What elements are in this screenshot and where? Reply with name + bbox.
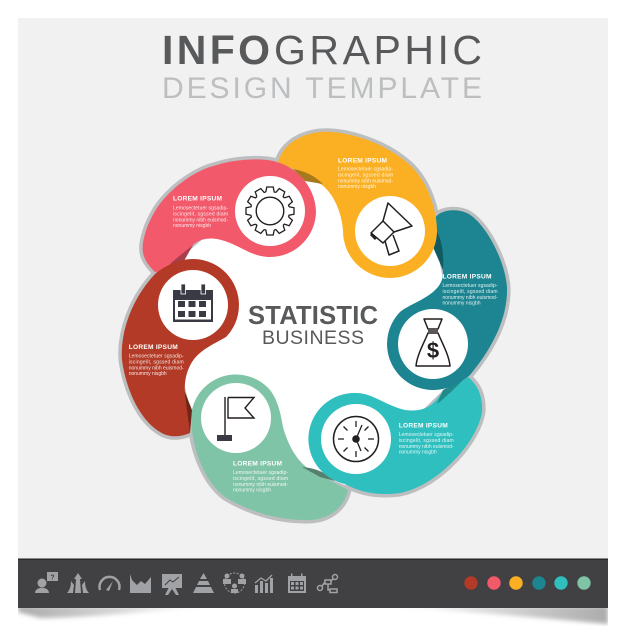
shadow: green fold (302, 467, 335, 481)
panel: brick red segment (122, 259, 239, 436)
icon: gear (246, 187, 294, 235)
diagram grey outline (122, 132, 507, 520)
icon: money bag: $ (427, 338, 439, 363)
text: gear segment: nonummy nibh euismod- (173, 218, 228, 224)
shadow: pink fold (165, 245, 193, 272)
icon: clock (334, 416, 378, 462)
text: money segment: LOREM IPSUM (442, 274, 492, 280)
icon: calendar (173, 284, 213, 322)
text: clock segment: LOREM IPSUM (399, 422, 448, 430)
title: INFO (162, 27, 270, 73)
text: calendar segment: nonummy nibh euismod- (129, 366, 184, 372)
icon circle: megaphone (355, 196, 425, 266)
icon: gauge needle (106, 581, 113, 591)
icon: people circle (223, 573, 246, 593)
text: money segment: iscingelit, sgssed diam (442, 289, 498, 295)
panel: dark teal segment (387, 210, 507, 390)
shadow: dark teal fold (433, 232, 443, 270)
icon: flag (217, 397, 254, 441)
panel: orange segment (278, 132, 437, 278)
shadow: red fold (184, 391, 192, 432)
icon: flow diagram (318, 574, 338, 592)
text: flag segment: nonummy nisgbh (233, 488, 271, 494)
title (162, 27, 482, 73)
shadow: light teal fold (437, 380, 463, 404)
panel: pink segment (143, 159, 316, 272)
bottom bar (18, 559, 608, 608)
icon: gauge (100, 577, 119, 590)
text: money segment: Lemosectetuer sgsadip- (442, 283, 498, 289)
bar shadows (18, 606, 608, 624)
white centre (158, 170, 462, 485)
icon circle: money bag (398, 309, 468, 379)
panel: green segment (191, 374, 348, 520)
text: clock segment: nonummy nisgbh (399, 450, 437, 456)
text: calendar segment: iscingelit, sgssed diam (129, 360, 184, 366)
text: megaphone segment: nonummy nisgbh (338, 184, 376, 190)
title: GRAPHIC (274, 27, 482, 73)
text: flag segment: nonummy nibh euismod- (233, 482, 288, 488)
text: money segment: nonummy nisgbh (442, 300, 481, 306)
text: calendar segment (129, 344, 184, 377)
panel: light teal segment (308, 377, 482, 494)
icon circle: flag (201, 383, 271, 453)
icon circle: calendar (158, 270, 228, 340)
text: money segment (442, 274, 498, 306)
colour dots (464, 576, 591, 590)
icon circle: clock (321, 404, 391, 474)
centre heading: STATISTIC (248, 302, 378, 330)
text: megaphone segment: nonummy nibh euismod- (338, 178, 393, 184)
icon: growth chart (255, 575, 273, 593)
text: gear segment: LOREM IPSUM (173, 196, 222, 202)
text: clock segment: Lemosectetuer sgsadip- (399, 432, 454, 438)
icon: presentation board (162, 574, 182, 595)
text: calendar segment: LOREM IPSUM (129, 344, 178, 351)
text: gear segment (173, 196, 228, 229)
text: clock segment (399, 422, 454, 456)
text: clock segment: nonummy nibh euismod- (399, 444, 454, 450)
text: megaphone segment: iscingelit, sgssed diam (338, 172, 393, 178)
text: megaphone segment (338, 158, 393, 190)
icon: person question: ? (50, 574, 55, 582)
text: megaphone segment: Lemosectetuer sgsadip- (338, 166, 393, 172)
icon: small calendar (288, 574, 306, 593)
text: flag segment (233, 460, 288, 494)
bottom icon row (35, 572, 338, 595)
circular diagram (122, 132, 507, 520)
text: gear segment: iscingelit, sgssed diam (173, 212, 228, 218)
text: calendar segment: Lemosectetuer sgsadip- (129, 354, 184, 360)
text: megaphone segment: LOREM IPSUM (338, 158, 388, 164)
text: gear segment: Lemosectetuer sgsadip- (173, 206, 228, 212)
subtitle: DESIGN TEMPLATE (162, 72, 482, 105)
bar top edge (18, 558, 608, 560)
centre subheading: BUSINESS (262, 327, 364, 349)
text: clock segment: iscingelit, sgssed diam (399, 438, 454, 444)
text: calendar segment: nonummy nisgbh (129, 371, 167, 377)
icon: person question (35, 572, 58, 593)
icon: merging arrows (67, 573, 89, 593)
shadow: orange fold (293, 169, 323, 184)
text: flag segment: iscingelit, sgssed diam (233, 476, 288, 482)
text: flag segment: Lemosectetuer sgsadip- (233, 470, 288, 476)
text: money segment: nonummy nibh euismod- (442, 295, 498, 301)
text: gear segment: nonummy nisgbh (173, 223, 211, 229)
icon circle: gear (235, 176, 305, 246)
icon: area chart (130, 574, 151, 593)
icon: pyramid (193, 573, 214, 593)
icon: megaphone (371, 203, 412, 255)
text: flag segment: LOREM IPSUM (233, 460, 282, 468)
